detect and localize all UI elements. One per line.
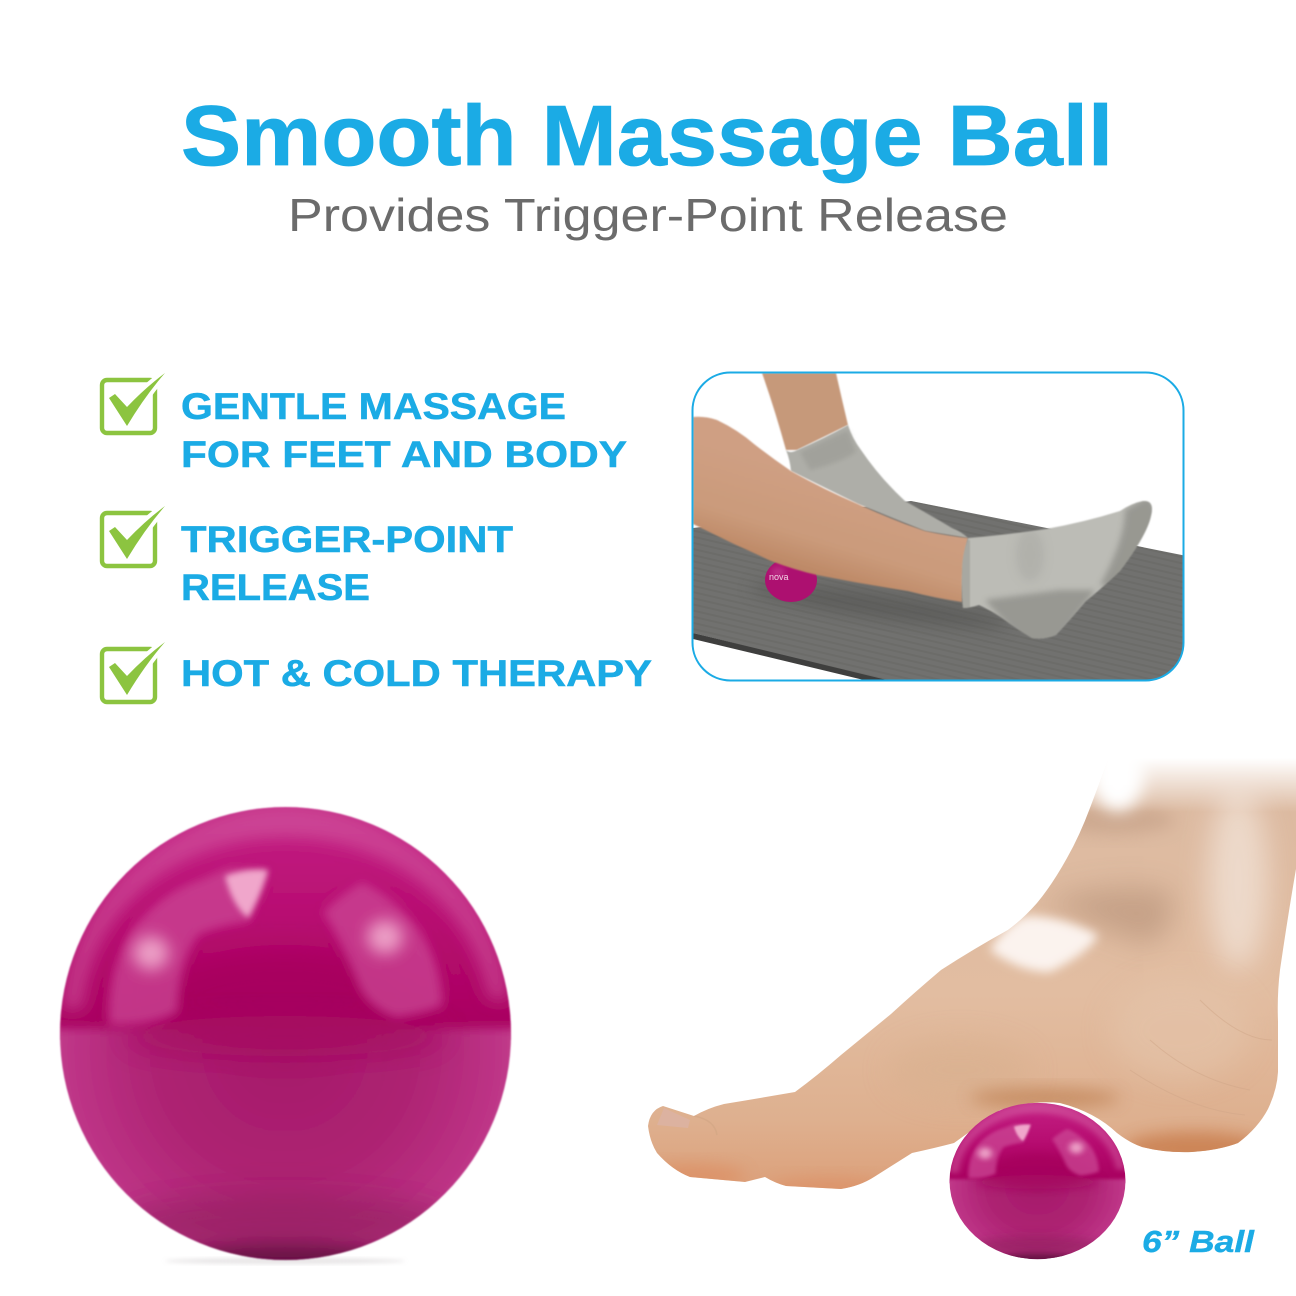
label: ball size: 6” Ball — [1142, 1224, 1256, 1259]
rear sock — [786, 425, 968, 538]
foot — [648, 763, 1296, 1189]
title: Smooth Massage Ball — [181, 89, 1113, 184]
benefit: trigger-point release: RELEASE — [181, 567, 370, 608]
benefit: trigger-point release: TRIGGER-POINT — [181, 519, 513, 560]
ankle crease shading — [1040, 887, 1172, 945]
benefit: gentle massage: FOR FEET AND BODY — [181, 434, 627, 475]
benefit: gentle massage: GENTLE MASSAGE — [181, 386, 566, 427]
front leg — [693, 417, 968, 602]
white highlight patch — [990, 916, 1098, 972]
panel border — [692, 372, 1184, 680]
photo: large pink massage ball — [40, 800, 530, 1294]
massage ball under calf — [765, 558, 817, 602]
subtitle: Provides Trigger-Point Release — [288, 189, 1008, 241]
benefit list — [102, 373, 652, 702]
yoga mat — [693, 501, 1187, 682]
icon: check mark 1 — [102, 373, 165, 433]
benefit: trigger-point release — [181, 519, 513, 608]
small pink ball under foot — [942, 1100, 1133, 1271]
toenail — [657, 1108, 690, 1128]
rear leg — [762, 373, 848, 450]
benefit: gentle massage — [181, 386, 627, 475]
benefit: hot and cold therapy: HOT & COLD THERAPY — [181, 653, 652, 694]
front sock — [961, 500, 1153, 640]
icon: check mark 2 — [102, 506, 165, 566]
heel wrinkles — [1130, 1000, 1272, 1099]
icon: check mark 3 — [102, 642, 165, 702]
panel: calf massage photo — [692, 372, 1187, 682]
massage ball under calf: nova — [769, 572, 789, 582]
photo: foot on ball — [635, 739, 1296, 1271]
